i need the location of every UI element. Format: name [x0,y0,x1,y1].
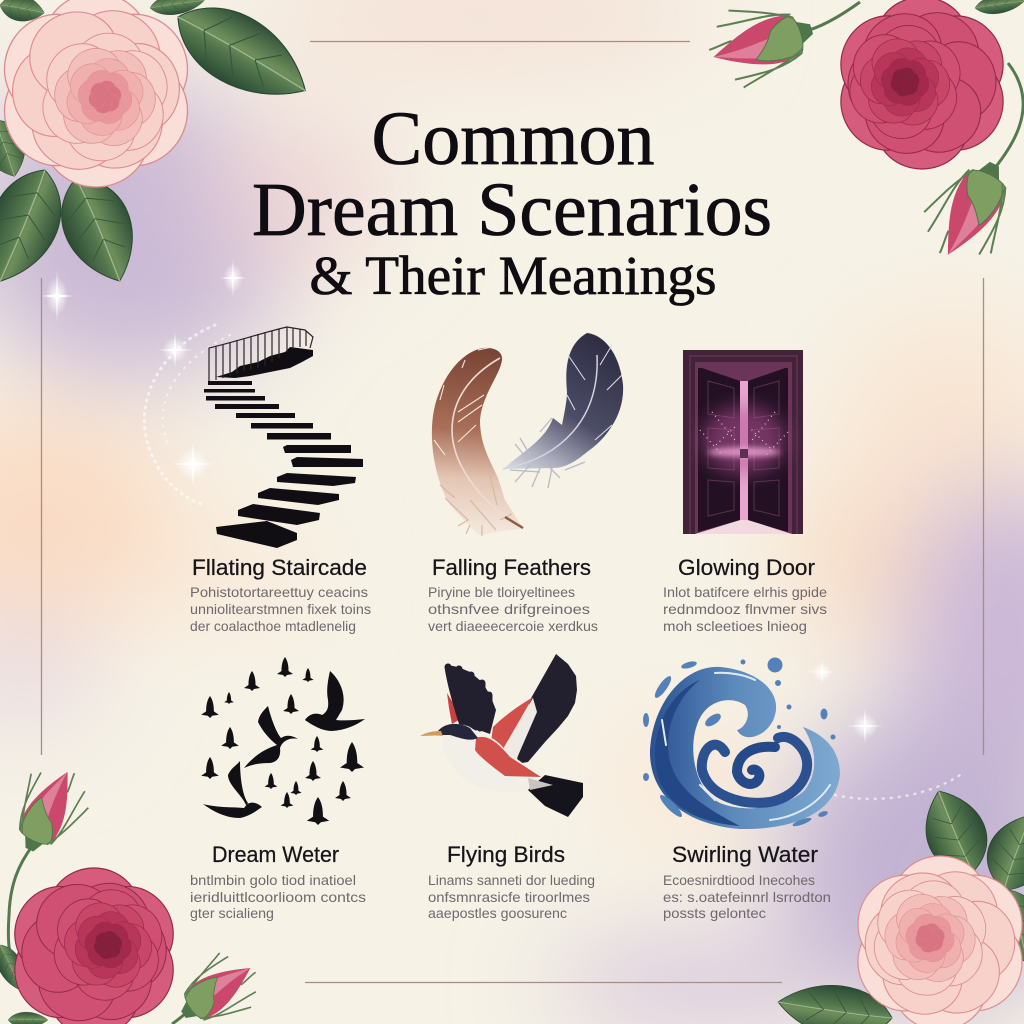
label: swirling water: possts gelontec [663,905,766,921]
corner: bottom-left crimson rose with buds [0,757,271,1024]
label: glowing door: rednmdooz flnvmer sivs [663,601,827,617]
label: swirling water [663,842,831,921]
label: floating staircase: unniolitearstmnen fixek toins [190,601,371,617]
label: floating staircase: Pohistotortareettuy ceacins [190,584,368,600]
icon: floating staircase [204,327,363,548]
label: falling feathers [428,555,598,634]
title [252,97,772,306]
label: flying birds: onfsmnrasicfe tiroorlmes [428,889,590,905]
title: Dream Scenarios [252,168,772,252]
icon: swirling water [643,658,840,829]
corner: top-right crimson rose with bud [700,0,1024,273]
icon: flying bird [420,654,583,817]
label: flying birds: Linams sanneti dor lueding [428,872,595,888]
corner: top-left pink rose with leaves [0,0,323,294]
label: falling feathers: Piryine ble tloiryeltinees [428,584,575,600]
label: floating staircase: der coalacthoe mtadlenelig [190,618,356,634]
icon: bird silhouettes [201,657,365,825]
label: flying birds: aaepostles goosurenc [428,905,567,921]
label: flying birds: Flying Birds [447,842,565,867]
label: swirling water: Ecoesnirdtiood Inecohes [663,872,815,888]
label: falling feathers: vert diaeeecercoie xerdkus [428,618,598,634]
label: floating staircase [190,555,371,634]
label: dream water: ieridluittlcoorlioom contcs [190,889,366,905]
label: floating staircase: Fllating Staircade [192,555,367,580]
label: glowing door: moh scleetioes lnieog [663,618,807,634]
label: glowing door: Inlot batifcere elrhis gpide [663,584,827,600]
label: dream water: Dream Weter [212,842,339,867]
label: dream water [190,842,366,921]
label: flying birds [428,842,595,921]
label: dream water: gter scialieng [190,905,274,921]
icon: falling feathers [432,333,623,536]
label: glowing door [663,555,827,634]
label: swirling water: Swirling Water [672,842,818,867]
corner: bottom-right pink rose with leaves [774,780,1024,1024]
icon: glowing door [683,350,803,534]
sparkles and particle trail [42,258,960,799]
label: falling feathers: othsnfvee drifgreinoes [428,601,590,617]
label: glowing door: Glowing Door [678,555,815,580]
label: swirling water: es: s.oatefeinnrl lsrrodton [663,889,831,905]
label: dream water: bntlmbin golo tiod inatioel [190,872,356,888]
title: & Their Meanings [310,245,716,306]
title: Common [372,97,654,181]
label: falling feathers: Falling Feathers [432,555,591,580]
